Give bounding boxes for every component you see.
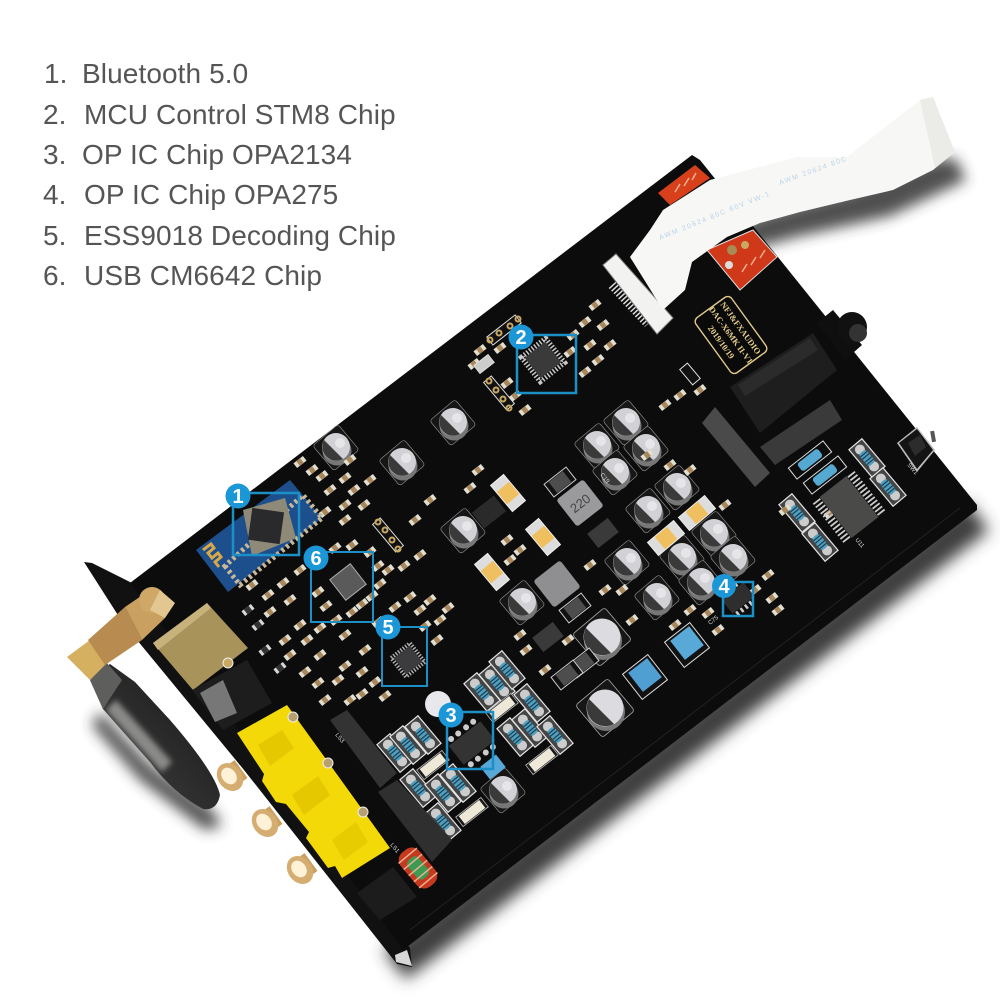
silkscreen labels: C75: [708, 615, 720, 627]
diodes and regulator ICs: [472, 467, 619, 690]
white capacitors: [417, 693, 558, 827]
power inductors: [533, 479, 604, 608]
OPA2134 chip: [442, 714, 502, 772]
STM8 MCU chip: [522, 339, 564, 381]
callout 4: OPA275 box: [723, 582, 753, 616]
red connector bottom: [707, 230, 777, 290]
power inductors: 220: [567, 491, 593, 516]
pin headers: [373, 315, 700, 552]
tantalum capacitors: [475, 475, 715, 590]
gold SMA connectors: [67, 587, 175, 680]
callout 1: Bluetooth box: [233, 493, 299, 555]
text list: chip legend: MCU Control STM8 Chip: [84, 99, 396, 130]
U11 chip: [816, 473, 882, 541]
optical port: [192, 658, 272, 730]
text list: chip legend: OP IC Chip OPA2134: [82, 139, 352, 170]
gold label plate: 2019/10/19: [706, 323, 737, 361]
silkscreen labels: U11: [853, 537, 865, 550]
badge 5: 5: [382, 617, 394, 639]
callout 6: USB box: [311, 552, 373, 622]
text list: chip legend: 6.: [43, 260, 67, 291]
badge 6: [304, 546, 328, 570]
badge 6: 6: [310, 548, 322, 570]
board edge highlight: [410, 508, 960, 930]
text list: chip legend: 4.: [43, 179, 67, 210]
badge 2: 2: [515, 327, 527, 349]
gold label plate: NFJ&FXAUDIO: [718, 300, 763, 356]
ribbon connector: [603, 254, 673, 334]
OPA275 chip: [720, 580, 756, 616]
callout 2: MCU box: [517, 335, 576, 393]
blue axial resistors: [788, 441, 847, 494]
badge 2: [508, 324, 534, 350]
ESS9018 decoding chip: [391, 643, 425, 677]
silkscreen labels: [333, 417, 919, 855]
flat ribbon cable: [630, 97, 955, 310]
text list: chip legend: 5.: [43, 220, 67, 251]
callout 5: ESS box: [382, 627, 427, 686]
switch: [897, 427, 936, 472]
callout 3: OPA2134 box: [447, 712, 493, 769]
text list: chip legend: Bluetooth 5.0: [82, 58, 248, 89]
silkscreen labels: SW1: [905, 462, 919, 477]
badge 5: [376, 614, 400, 640]
plate tip: [395, 950, 412, 966]
other drop shadows: [92, 158, 966, 830]
badge 4: 4: [718, 576, 730, 598]
silkscreen labels: LS3: [333, 732, 345, 745]
gold label plate: DAC-X6MK II-V1: [707, 304, 755, 366]
text list: chip legend: 3.: [43, 139, 67, 170]
front plate: [84, 562, 412, 967]
text list: chip legend: 2.: [43, 99, 67, 130]
silkscreen labels: LS1: [388, 842, 400, 855]
circuit board: [130, 155, 977, 950]
electrolytic capacitors: [313, 399, 756, 814]
black ferrite bars: [330, 710, 452, 862]
text list: chip legend: [43, 58, 396, 291]
text list: chip legend: OP IC Chip OPA275: [84, 179, 338, 210]
badge 1: 1: [232, 486, 244, 508]
antenna: [90, 662, 220, 809]
badge 1: [226, 484, 250, 508]
flat ribbon cable: AWM 20624 80C 60V VW-1: [658, 190, 772, 242]
toroid inductor: [395, 843, 441, 893]
yellow RCA block: [237, 705, 390, 878]
USB chip CM6642: [330, 564, 366, 600]
text list: chip legend: ESS9018 Decoding Chip: [84, 220, 396, 251]
bluetooth module: [196, 480, 322, 592]
DC power jack: [357, 867, 417, 920]
silkscreen labels: C104: [446, 417, 461, 433]
precision resistors: [377, 439, 906, 841]
blue film capacitors: [623, 623, 709, 699]
headphone jack: [702, 310, 867, 487]
red connector top: [658, 165, 710, 205]
text list: chip legend: 1.: [44, 58, 68, 89]
board drop shadow: [395, 516, 978, 965]
USB-B gold port: [153, 603, 248, 690]
flat ribbon cable: AWM 20624 80C: [778, 155, 849, 187]
badge 3: 3: [445, 705, 457, 727]
small SMD parts: [241, 299, 837, 706]
badge 3: [438, 702, 464, 728]
gold label plate: [693, 294, 769, 376]
text list: chip legend: USB CM6642 Chip: [84, 260, 322, 291]
gold RCA sockets: [211, 758, 319, 889]
silkscreen labels: C19: [598, 472, 611, 485]
badge 4: [712, 574, 736, 598]
